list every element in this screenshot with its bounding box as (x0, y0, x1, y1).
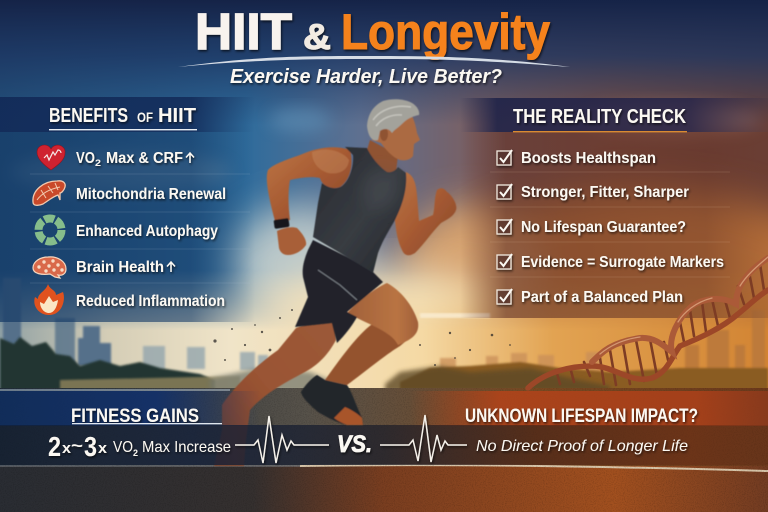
benefits heading: BENEFITS (49, 105, 128, 127)
panel: bottom bands (0, 389, 768, 465)
neck (367, 140, 398, 178)
ear (380, 127, 388, 141)
benefit: VO2 max: 2 (95, 158, 101, 168)
front arm (395, 172, 456, 255)
benefits heading (49, 105, 196, 127)
shoe (301, 375, 363, 425)
panel: unknown lifespan impact (465, 406, 698, 455)
reality heading: THE REALITY CHECK (513, 106, 686, 128)
panel: fitness gains (48, 406, 231, 462)
check item 4: Evidence = Surrogate Markers (521, 254, 724, 271)
panel: benefits of HIIT (0, 97, 255, 322)
fist (277, 227, 306, 255)
title (195, 3, 550, 60)
benefit: VO2 max: VO (76, 150, 95, 167)
front thigh (347, 283, 418, 345)
hair (367, 99, 419, 140)
tree line (0, 337, 768, 392)
benefits heading: HIIT (158, 105, 196, 127)
fitness stat: 3 (84, 431, 97, 462)
fitness stat: x (98, 440, 108, 457)
fitness stat: Max Increase (142, 439, 231, 456)
tank top (313, 147, 406, 273)
dust specks (213, 309, 511, 366)
lifespan heading: UNKNOWN LIFESPAN IMPACT? (465, 406, 698, 427)
fitness stat: 2 (133, 448, 138, 458)
road (0, 388, 768, 512)
icon: right heartbeat line (380, 415, 467, 462)
icon: flame (34, 284, 64, 315)
fitness stat: ~ (71, 436, 83, 455)
versus label: VS. (337, 431, 372, 458)
benefit: VO2 max (76, 150, 194, 168)
DNA helix (528, 257, 768, 388)
benefit: autophagy: Enhanced Autophagy (76, 223, 218, 240)
fitness stat: VO (113, 439, 133, 456)
front lower leg (325, 318, 412, 385)
back arm (267, 147, 352, 221)
icon: left heartbeat line (235, 416, 329, 463)
title: & (303, 16, 331, 57)
icon: heart (37, 145, 65, 170)
shorts (295, 240, 383, 343)
benefit: inflammation: Reduced Inflammation (76, 293, 225, 310)
check item 5: Part of a Balanced Plan (521, 289, 683, 306)
icon: brain (33, 257, 66, 278)
icon: mitochondria (33, 181, 65, 205)
benefit: brain health: Brain Health (76, 259, 164, 276)
panel: the reality check (460, 98, 768, 318)
watch (274, 218, 290, 229)
runner (267, 99, 456, 425)
fitness stat (48, 431, 231, 462)
city skyline (3, 278, 765, 376)
fitness heading: FITNESS GAINS (71, 406, 199, 427)
icon: recycling arrows (38, 218, 62, 242)
background: sky and ground scene (0, 0, 768, 388)
check item 2: Stronger, Fitter, Sharper (521, 184, 689, 201)
check item 1: Boosts Healthspan (521, 150, 656, 167)
title: HIIT (195, 3, 292, 60)
benefit: mitochondria: Mitochondria Renewal (76, 186, 226, 203)
subtitle: Exercise Harder, Live Better? (230, 66, 502, 88)
fitness stat: x (62, 440, 72, 457)
lifespan note: No Direct Proof of Longer Life (476, 438, 688, 455)
benefit: VO2 max: Max & CRF (106, 150, 183, 167)
runner: rear leg (214, 321, 336, 466)
fitness stat: 2 (48, 431, 61, 462)
face (372, 113, 420, 160)
benefits heading: OF (137, 109, 153, 125)
title: Longevity (341, 4, 550, 60)
check item 3: No Lifespan Guarantee? (521, 219, 686, 236)
title swoosh (178, 56, 570, 67)
